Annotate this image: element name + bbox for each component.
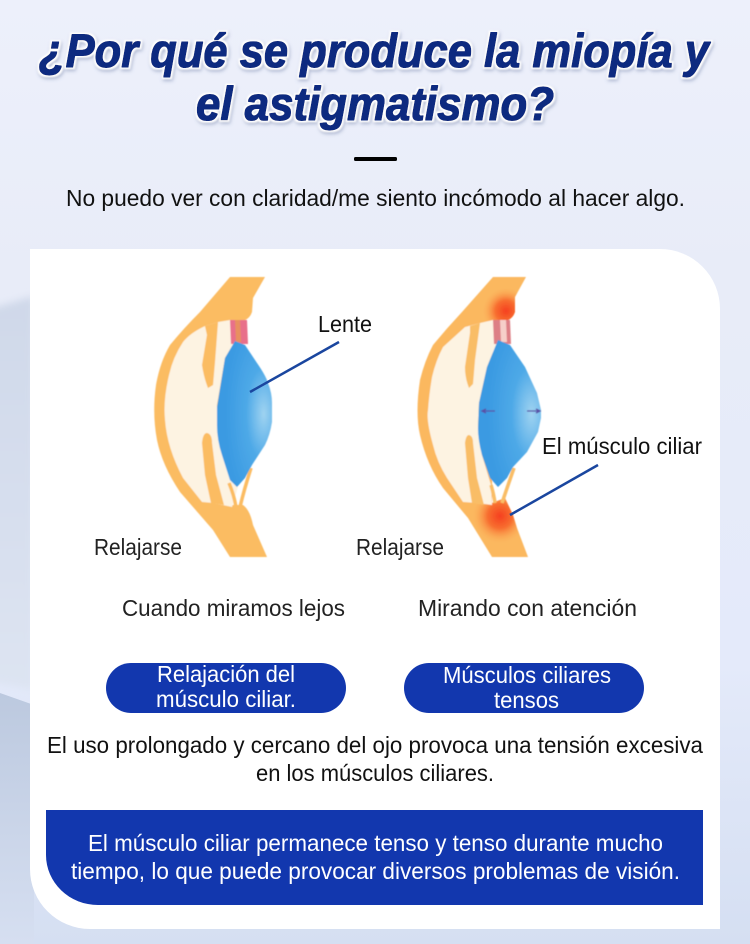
callout: conclusion: tiempo, lo que puede provocar diversos problemas de visión. [71,858,680,884]
eye interior [428,320,498,505]
lower ligaments [491,468,514,503]
eye interior [164,320,238,507]
label: lens: Lente [318,311,372,337]
pill: relaxed muscle: músculo ciliar. [156,686,296,712]
explanatory text: El uso prolongado y cercano del ojo provoca una tensión excesiva [47,732,703,758]
title [39,24,712,130]
caption: far view: Cuando miramos lejos [122,595,345,621]
leader line: lens [250,342,339,392]
subtitle: No puedo ver con claridad/me siento incómodo al hacer algo. [66,185,685,211]
divider [354,157,397,161]
title: el astigmatismo? [196,77,554,130]
hot spots [477,292,518,539]
label: ciliary muscle: El músculo ciliar [542,433,702,459]
eye wall [418,277,528,557]
lens [478,340,541,487]
lower ciliary process [202,433,224,505]
leader line: ciliary muscle [510,465,598,515]
lower ligaments [229,468,251,507]
pill: tense muscle: tensos [494,687,559,713]
upper ligaments [493,320,511,344]
caption: focused view: Mirando con atención [418,595,637,621]
pill: relaxed muscle: Relajación del [157,661,295,687]
lens [217,341,272,487]
label: relax left: Relajarse [94,534,182,560]
callout: conclusion: El músculo ciliar permanece tenso y tenso durante mucho [88,830,663,856]
diagram: tense eye [418,277,541,557]
pill: tense muscle [404,662,644,713]
eye wall [154,277,267,557]
label: relax right: Relajarse [356,534,444,560]
panel: white card [30,249,720,929]
lower ciliary process [465,435,484,505]
force arrows [482,409,540,413]
explanatory text [47,732,703,786]
upper ligaments [230,320,248,344]
diagram: relaxed eye [154,277,272,557]
upper ciliary process [202,322,218,388]
pill: relaxed muscle [106,661,346,713]
explanatory text: en los músculos ciliares. [256,760,494,786]
upper ciliary process [465,323,480,388]
title: ¿Por qué se produce la miopía y [39,24,712,77]
pill: tense muscle: Músculos ciliares [443,662,611,688]
callout: conclusion [46,810,703,905]
